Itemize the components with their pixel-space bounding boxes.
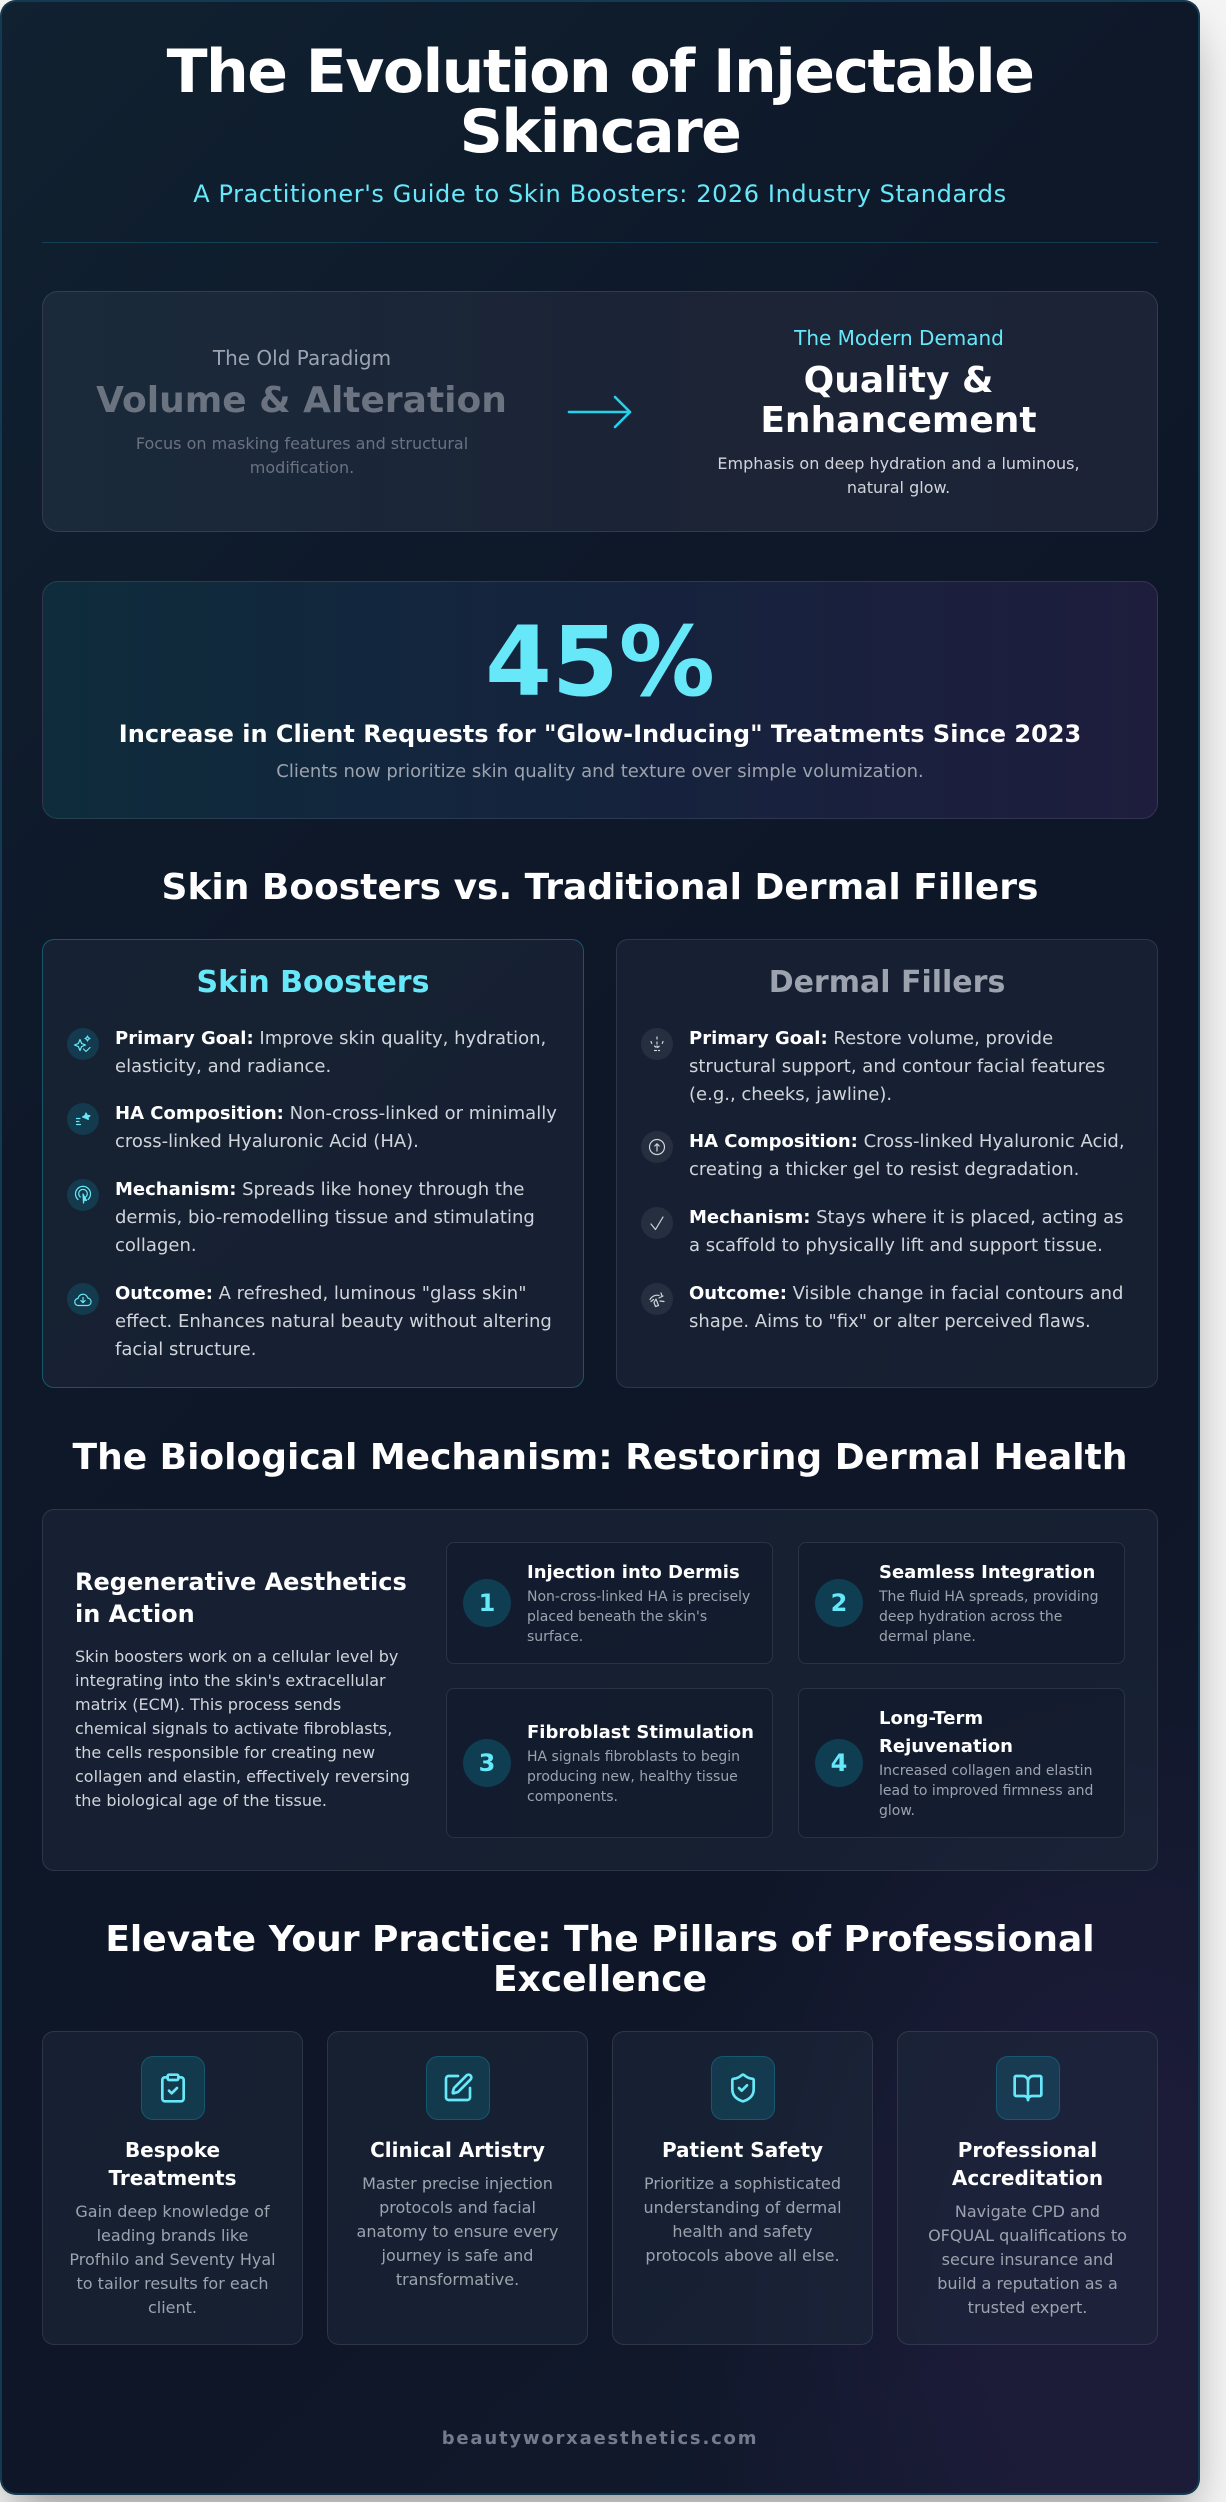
pillar: professional accreditation [897,2031,1158,2345]
text: HA composition: cross-linked Hyaluronic Acid (HA). [115,1131,419,1152]
pillar description: Prioritize a sophisticated [644,2174,841,2193]
icon: check [641,1207,673,1239]
pillar description: journey is safe and [382,2246,533,2265]
stat heading: Increase in Client Requests for "Glow-Inducing" Treatments Since 2023 [119,720,1081,748]
modern demand heading: Enhancement [760,400,1037,441]
text: primary goal: Primary Goal: Restore volume, provide [689,1028,1053,1049]
pillar description: to tailor results for each [77,2274,268,2293]
heading: comparison: Skin Boosters vs. Traditional Dermal Fillers [162,867,1038,908]
step number 1: 1 [479,1589,495,1617]
panel body text: integrating into the skin's extracellular [75,1671,386,1690]
text: outcome: effect. Enhances natural beauty without altering [115,1311,552,1332]
old paradigm heading: Volume & Alteration [96,380,507,421]
skin boosters heading: Skin Boosters [197,965,429,1000]
step 3 title: Fibroblast Stimulation [527,1722,754,1743]
old paradigm description [136,434,468,477]
old paradigm description: modification. [250,458,354,477]
pillar title [952,2138,1103,2190]
pillar title: Clinical Artistry [370,2138,545,2162]
step 2 description [878,1589,1098,1645]
pillar description: protocols and facial [379,2198,536,2217]
text: HA composition: creating a thicker gel to resist degradation. [689,1159,1079,1180]
step 4 description [879,1763,1093,1819]
text: mechanism: dermis, bio-remodelling tissue and stimulating [115,1207,535,1228]
heading: pillars: Elevate Your Practice: The Pillars of Professional [105,1919,1095,1960]
stat number: 45% [485,606,715,718]
step number 1 [463,1579,511,1627]
modern demand heading [760,360,1037,441]
text: mechanism: Mechanism: Stays where it is placed, acting as [689,1207,1124,1228]
pillar description: transformative. [396,2270,519,2289]
title: The Evolution of Injectable [167,37,1033,107]
text: mechanism: collagen. [115,1235,197,1256]
step number 2: 2 [831,1589,847,1617]
icon: pencil square [426,2056,490,2120]
step 2 description: dermal plane. [879,1629,976,1645]
panel: regenerative aesthetics [42,1509,1158,1871]
panel heading: in Action [75,1600,195,1628]
modern demand label: The Modern Demand [794,326,1004,350]
step 1 description: Non-cross-linked HA is precisely [527,1589,750,1605]
panel: paradigm shift [42,291,1158,532]
step 4 description: Increased collagen and elastin [879,1763,1092,1779]
pillar description: Profhilo and Seventy Hyal [69,2250,276,2269]
panel body text: matrix (ECM). This process sends [75,1695,341,1714]
icon: lines and star [67,1103,99,1135]
modern demand description [717,454,1080,497]
pillar description: build a reputation as a [937,2274,1118,2293]
text: primary goal: Primary Goal: Improve skin quality, hydration, [115,1028,546,1049]
text: HA composition [689,1131,1125,1180]
step 1 description [527,1589,750,1645]
pillar description: Master precise injection [362,2174,553,2193]
step 1 [446,1542,773,1664]
text: outcome: shape. Aims to "fix" or alter perceived flaws. [689,1311,1091,1332]
step 4 title [879,1708,1013,1757]
text: outcome: Outcome: A refreshed, luminous "glass skin" [115,1283,526,1304]
step 2 description: The fluid HA spreads, providing [879,1589,1098,1605]
pillar description: trusted expert. [968,2298,1087,2317]
panel: key statistic [42,581,1158,819]
text: primary goal: elasticity, and radiance. [115,1056,331,1077]
pillar description: client. [148,2298,197,2317]
old paradigm description: Focus on masking features and structural [136,434,468,453]
step 3 description [527,1749,740,1805]
text: HA composition: HA Composition: Non-cross-linked or minimally [115,1103,557,1124]
pillar description: Navigate CPD and [955,2202,1100,2221]
step number 3: 3 [479,1749,495,1777]
step number 2 [815,1579,863,1627]
step 1 title: Injection into Dermis [527,1562,740,1583]
pillar title [108,2138,237,2190]
text: primary goal [689,1028,1105,1105]
icon: circle up arrow [641,1131,673,1163]
step 3 description: components. [527,1789,618,1805]
pillar: clinical artistry [327,2031,588,2345]
text: mechanism: Mechanism: Spreads like honey through the [115,1179,524,1200]
step 4 title: Long-Term [879,1708,983,1729]
icon: open book [996,2056,1060,2120]
text: primary goal: (e.g., cheeks, jawline). [689,1084,892,1105]
heading: biological mechanism: The Biological Mechanism: Restoring Dermal Health [73,1437,1127,1478]
step 4 title: Rejuvenation [879,1736,1013,1757]
panel body text: Skin boosters work on a cellular level by [75,1647,398,1666]
icon: face contour [641,1028,673,1060]
pillar title: Bespoke [125,2138,220,2162]
text: outcome: facial structure. [115,1339,256,1360]
text: mechanism [115,1179,535,1256]
text: HA composition: HA Composition: Cross-linked Hyaluronic Acid, [689,1131,1125,1152]
step 2 [798,1542,1125,1664]
pillar description [357,2174,558,2289]
icon: contour scribble [641,1283,673,1315]
text: outcome [115,1283,552,1360]
modern demand description: Emphasis on deep hydration and a luminous, [717,454,1080,473]
modern demand description: natural glow. [847,478,950,497]
step 3 [446,1688,773,1838]
pillar: bespoke treatments [42,2031,303,2345]
panel body text [75,1647,410,1810]
text: mechanism: a scaffold to physically lift and support tissue. [689,1235,1103,1256]
step 1 description: surface. [527,1629,583,1645]
pillar description: understanding of dermal [643,2198,842,2217]
panel heading: Regenerative Aesthetics [75,1568,407,1596]
text: HA composition [115,1103,557,1152]
text: primary goal: structural support, and contour facial features [689,1056,1105,1077]
pillar description: anatomy to ensure every [357,2222,558,2241]
pillar title: Patient Safety [662,2138,823,2162]
step 1 description: placed beneath the skin's [527,1609,707,1625]
panel body text: chemical signals to activate fibroblasts, [75,1719,392,1738]
step 2 title: Seamless Integration [879,1562,1095,1583]
modern demand heading: Quality & [804,360,993,401]
panel body text: the cells responsible for creating new [75,1743,375,1762]
pillar description [928,2202,1127,2317]
title: Skincare [460,97,740,167]
icon: clipboard check [141,2056,205,2120]
pillar description: secure insurance and [942,2250,1113,2269]
step 4 description: glow. [879,1803,915,1819]
subtitle: A Practitioner's Guide to Skin Boosters: 2026 Industry Standards [193,180,1007,208]
step 4 description: lead to improved firmness and [879,1783,1093,1799]
icon: cloud download [67,1283,99,1315]
panel: dermal fillers [616,939,1158,1388]
pillar: patient safety [612,2031,873,2345]
dermal fillers heading: Dermal Fillers [769,965,1005,1000]
step number 3 [463,1739,511,1787]
step number 4: 4 [831,1749,847,1777]
step 3 description: HA signals fibroblasts to begin [527,1749,740,1765]
heading: pillars [105,1919,1095,2000]
text: outcome [689,1283,1123,1332]
stat note: Clients now prioritize skin quality and texture over simple volumization. [276,761,924,782]
pillar title: Professional [958,2138,1097,2162]
panel: skin boosters [42,939,584,1388]
pillar title: Treatments [108,2166,237,2190]
text: primary goal [115,1028,546,1077]
panel heading [75,1568,407,1628]
step 2 description: deep hydration across the [879,1609,1062,1625]
pillar description: OFQUAL qualifications to [928,2226,1127,2245]
pillar description: Gain deep knowledge of [75,2202,270,2221]
text: mechanism [689,1207,1124,1256]
arrow [568,396,632,428]
icon: radar cursor [67,1179,99,1211]
step 3 description: producing new, healthy tissue [527,1769,738,1785]
icon: sparkle check [67,1028,99,1060]
text: outcome: Outcome: Visible change in facial contours and [689,1283,1123,1304]
panel body text: collagen and elastin, effectively reversing [75,1767,410,1786]
old paradigm label: The Old Paradigm [213,346,391,370]
step 4 [798,1688,1125,1838]
pillar description: leading brands like [97,2226,248,2245]
pillar description [69,2202,276,2317]
pillar description [643,2174,842,2265]
icon: shield check [711,2056,775,2120]
pillar title: Accreditation [952,2166,1103,2190]
heading: pillars: Excellence [493,1959,707,2000]
title [166,37,1033,167]
pillar description: protocols above all else. [645,2246,840,2265]
panel body text: the biological age of the tissue. [75,1791,327,1810]
footer website: beautyworxaesthetics.com [442,2428,758,2449]
step number 4 [815,1739,863,1787]
pillar description: health and safety [672,2222,813,2241]
